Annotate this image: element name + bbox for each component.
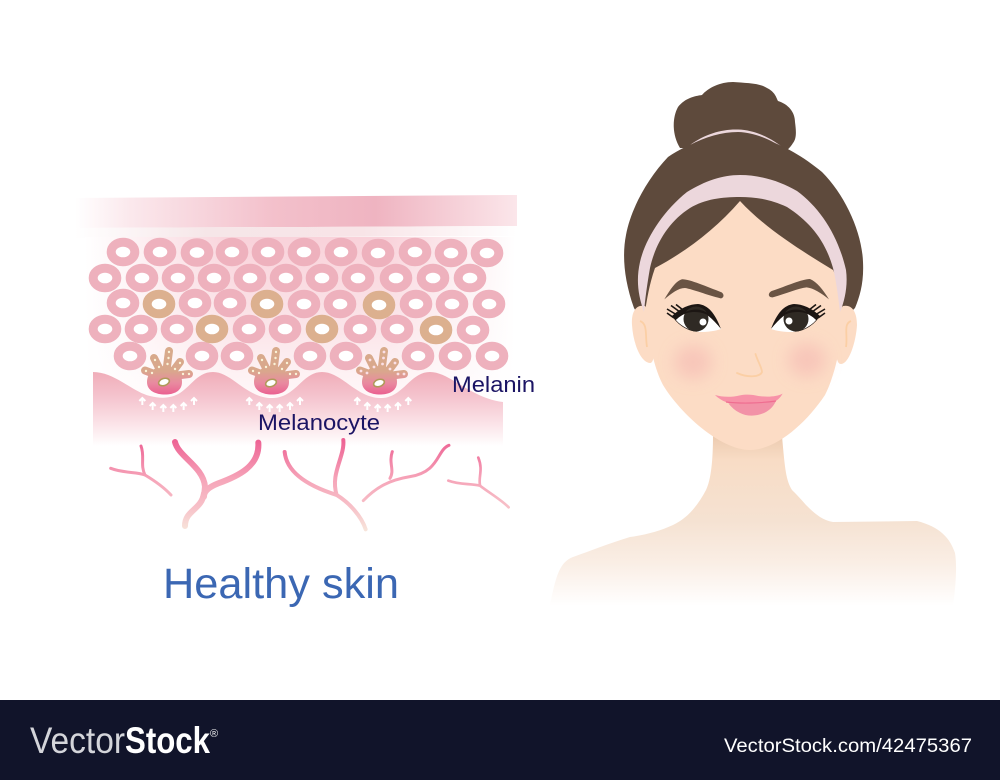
VectorStock logo: Vector: [30, 720, 125, 761]
illustration: woman's face: [550, 82, 956, 605]
bun hair band: [690, 129, 786, 150]
panel: skin cross-section: [75, 195, 535, 529]
melanin-containing cells: [147, 294, 448, 340]
eyebrows: [664, 279, 829, 299]
hair: [624, 135, 863, 318]
stratum corneum band: [75, 195, 517, 238]
hair bun: [674, 82, 796, 152]
footer bar: [0, 700, 1000, 780]
melanocyte 2: [252, 351, 297, 394]
nose: [737, 354, 762, 376]
VectorStock logo: [30, 720, 218, 761]
dermis: [93, 372, 503, 446]
heading: Healthy skin: Healthy skin: [163, 560, 399, 608]
label: Melanocyte: Melanocyte: [258, 410, 380, 435]
melanocyte 3: [360, 351, 405, 394]
white arrows: [139, 398, 411, 412]
epidermis background: [85, 237, 515, 397]
label: Melanin: Melanin: [452, 372, 535, 397]
right eye: [771, 304, 825, 332]
blood vessels: [111, 440, 509, 529]
cheeks: [674, 343, 826, 379]
melanocyte 1: [145, 351, 190, 394]
VectorStock logo: Stock: [125, 720, 210, 761]
skin cells: [93, 242, 504, 366]
VectorStock logo: ®: [210, 728, 218, 740]
ears: [632, 306, 857, 364]
left eye: [667, 304, 721, 332]
lips: [715, 394, 783, 416]
headband: [638, 175, 847, 312]
neck and shoulders: [550, 436, 956, 605]
image id: VectorStock.com/42475367: [724, 736, 972, 757]
face: [645, 201, 843, 450]
